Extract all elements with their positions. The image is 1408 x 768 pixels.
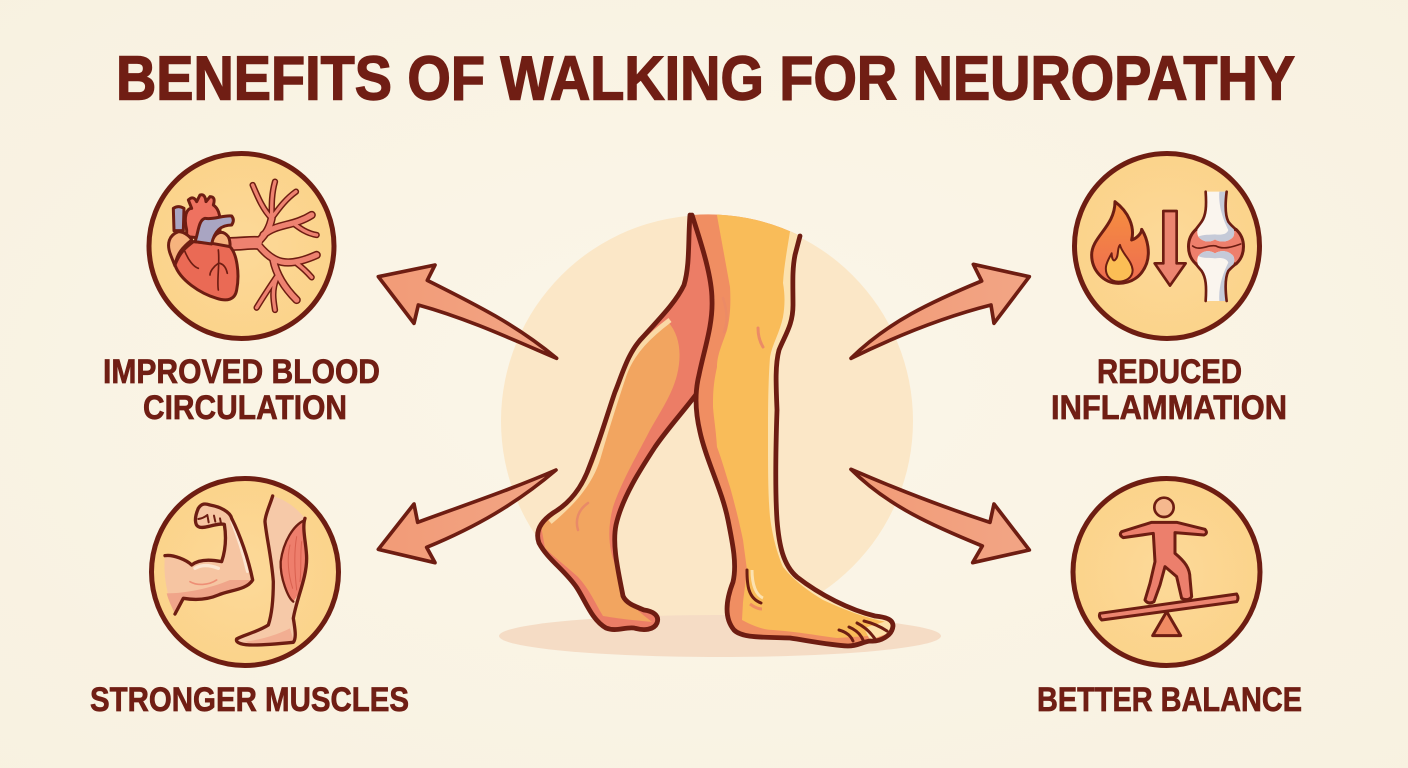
icon: heart and blood vessels [149,154,334,338]
title: BENEFITS OF WALKING FOR NEUROPATHY [116,44,1295,114]
label: stronger muscles: STRONGER MUSCLES [90,681,409,719]
heart [169,195,238,300]
label: improved blood circulation [103,353,380,427]
down arrow [1155,211,1186,286]
vessel tree [230,182,317,310]
arrow: to improved blood circulation [378,265,557,358]
calf muscle [281,520,307,602]
glow circle behind legs [501,215,913,627]
ground shadow [499,615,941,657]
leg [236,496,307,645]
arm [164,504,253,614]
label: reduced inflammation [1051,353,1287,427]
label: improved blood circulation: IMPROVED BLOOD [103,353,380,391]
arrow: to better balance [851,469,1029,563]
flame [1092,202,1148,283]
arrow: to reduced inflammation [851,264,1029,358]
central walking legs illustration [499,200,941,657]
icon: flame, down arrow and knee joint [1074,154,1260,338]
back leg [535,212,710,632]
front leg [691,212,896,648]
icon: figure balancing on seesaw [1073,478,1260,666]
label: reduced inflammation: REDUCED [1097,353,1242,391]
arrow: to stronger muscles [378,470,556,563]
label: improved blood circulation: CIRCULATION [143,389,347,427]
knee joint [1188,229,1243,264]
icon: flexed arm and calf muscle [152,478,338,666]
label: better balance: BETTER BALANCE [1037,681,1302,719]
label: reduced inflammation: INFLAMMATION [1051,389,1287,427]
